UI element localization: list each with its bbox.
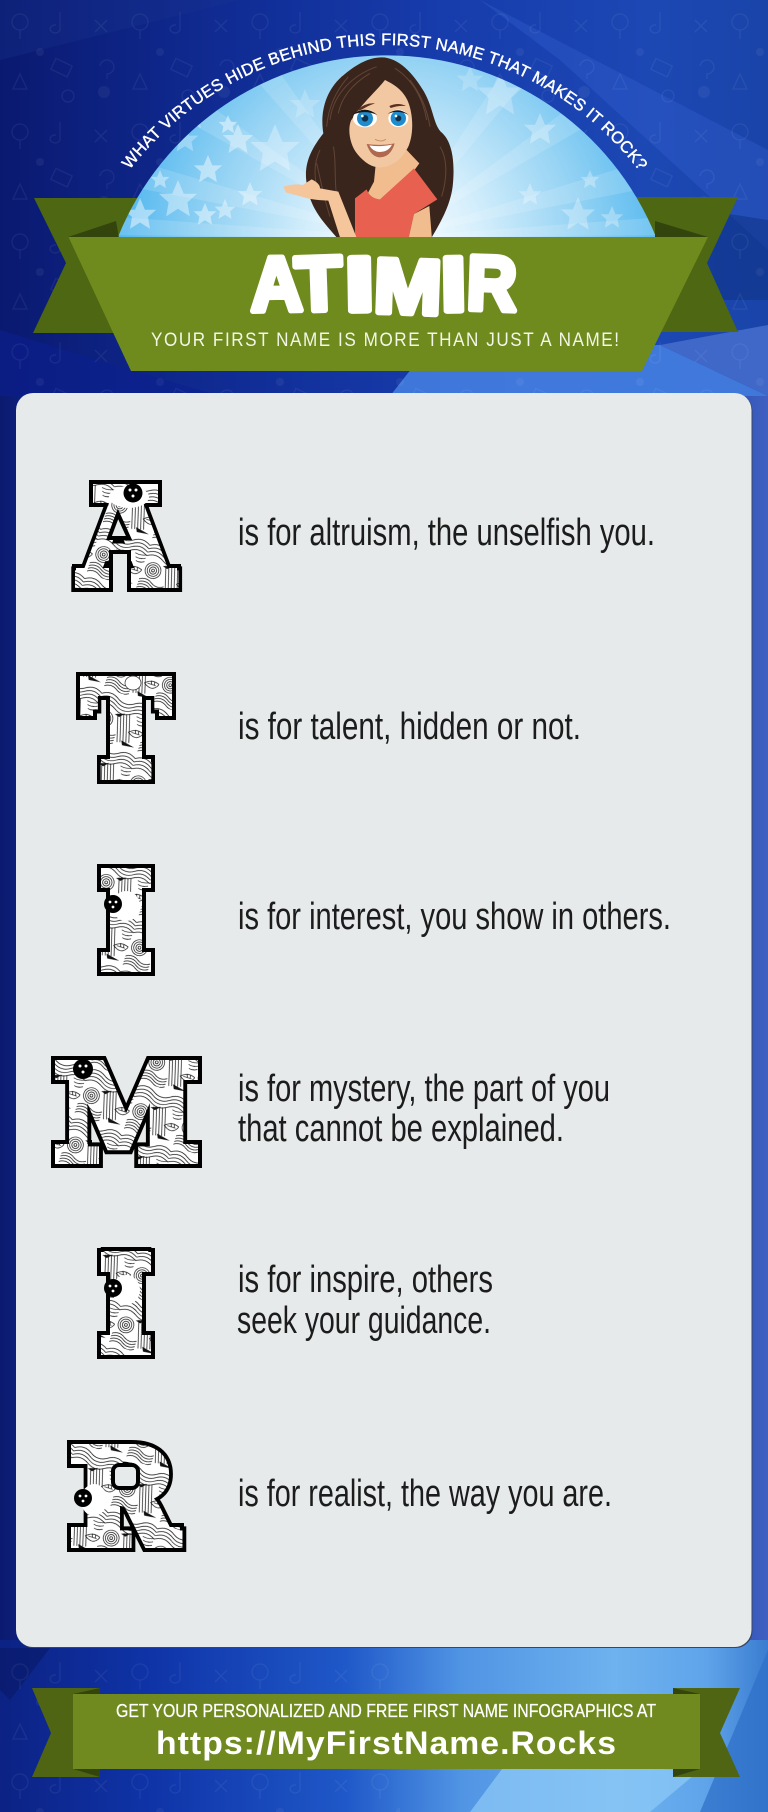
row 5 text: is for inspire, others — [238, 1259, 493, 1301]
hand and left arm — [283, 179, 357, 239]
letter I: I — [103, 847, 149, 998]
row 4 text — [238, 1068, 610, 1150]
letter R: R — [75, 1423, 178, 1574]
row 5 text — [237, 1259, 493, 1342]
name title: T — [294, 240, 344, 328]
flower detail — [74, 1484, 107, 1516]
gap between legs — [111, 552, 129, 594]
footer tail right — [673, 1688, 740, 1777]
nose — [375, 139, 386, 141]
footer url: https://MyFirstName.Rocks — [156, 1725, 617, 1761]
flower detail — [73, 1059, 93, 1079]
footer tail left — [32, 1688, 100, 1777]
name title: R — [465, 240, 518, 328]
white circle detail — [125, 676, 141, 690]
letter counter — [109, 514, 129, 538]
letter A: A — [79, 463, 174, 614]
name title: M — [372, 243, 443, 331]
left eye — [352, 109, 377, 127]
flower detail — [104, 1275, 140, 1305]
letter T: T — [85, 655, 167, 806]
letter M: M — [57, 1039, 196, 1190]
content panel — [16, 393, 752, 1648]
row 2 text: is for talent, hidden or not. — [238, 706, 581, 748]
letter I: I — [103, 847, 149, 998]
name title: I — [440, 242, 467, 328]
footer ribbon — [32, 1688, 740, 1777]
ribbon fold left — [68, 221, 119, 238]
letter A: A — [79, 463, 174, 614]
left ribbon tail — [33, 198, 140, 333]
face — [349, 80, 412, 167]
row 4 text: that cannot be explained. — [238, 1108, 564, 1150]
letter T: T — [85, 655, 167, 806]
hair — [306, 57, 454, 239]
name title: I — [344, 241, 375, 328]
ribbon fold right — [655, 221, 708, 238]
mouth — [367, 143, 395, 157]
letter counter — [113, 1465, 138, 1488]
curved headline: WHAT VIRTUES HIDE BEHIND THIS FIRST NAME THAT MAKES IT ROCK? — [120, 33, 647, 168]
row 1 text: is for altruism, the unselfish you. — [238, 512, 655, 554]
name title: A — [250, 241, 303, 328]
letter R: R — [75, 1423, 178, 1574]
right eye — [388, 110, 409, 127]
dome sunburst — [118, 55, 655, 237]
name title — [250, 240, 518, 331]
tagline: YOUR FIRST NAME IS MORE THAN JUST A NAME! — [151, 329, 619, 350]
neck and chest — [366, 150, 419, 201]
letter I: I — [103, 1230, 149, 1381]
row 5 text: seek your guidance. — [237, 1300, 491, 1342]
main ribbon — [68, 221, 708, 371]
letter M: M — [57, 1039, 196, 1190]
flower detail — [104, 891, 140, 921]
eyebrows — [357, 103, 406, 111]
shirt — [355, 168, 437, 239]
right arm — [408, 206, 432, 239]
letter I: I — [103, 1230, 149, 1381]
character illustration — [283, 57, 454, 239]
stars — [124, 66, 623, 230]
flower detail — [109, 484, 149, 508]
row 6 text: is for realist, the way you are. — [238, 1473, 612, 1515]
right ribbon tail — [630, 197, 738, 332]
footer call to action: GET YOUR PERSONALIZED AND FREE FIRST NAME INFOGRAPHICS AT — [116, 1701, 656, 1721]
row 4 text: is for mystery, the part of you — [238, 1068, 610, 1110]
